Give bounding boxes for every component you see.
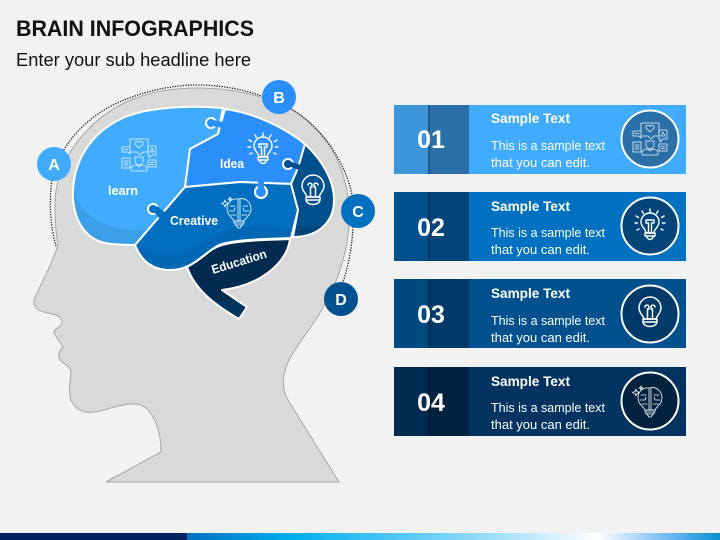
brain piece: learn — [70, 107, 223, 250]
title: BRAIN INFOGRAPHICS — [16, 16, 254, 41]
panel: row 03: Sample Text — [491, 285, 570, 301]
panel: row 03: 03 — [417, 301, 445, 329]
panel: row 02 — [394, 192, 686, 261]
icon: learn — [122, 139, 156, 171]
head illustration — [34, 80, 375, 482]
panel: row 03: that you can edit. — [491, 331, 590, 345]
label: education: Education — [210, 247, 268, 277]
badge C: C — [352, 204, 364, 221]
panel: row 03 — [394, 279, 686, 348]
head silhouette — [34, 88, 349, 482]
badge A — [37, 147, 71, 181]
brain piece: idea — [185, 109, 305, 187]
panel: row 04: This is a sample text — [491, 401, 606, 415]
panel: row 02: 02 — [417, 214, 445, 242]
badge D: D — [335, 292, 347, 309]
panel: row 02: This is a sample text — [491, 226, 606, 240]
panel: row 01: Sample Text — [491, 110, 570, 126]
badge B — [262, 80, 296, 114]
panel: row 02: Sample Text — [491, 198, 570, 214]
panel: row 03: This is a sample text — [491, 314, 606, 328]
panel: row 04: that you can edit. — [491, 418, 590, 432]
panel: row 04 — [394, 367, 686, 436]
panel: row 04: Sample Text — [491, 373, 570, 389]
label: creative: Creative — [170, 214, 218, 228]
icon: plain bulb — [302, 175, 324, 204]
dotted arc around head — [50, 85, 353, 282]
brain piece: creative — [135, 178, 298, 275]
badge C — [341, 194, 375, 228]
label: idea: Idea — [220, 157, 245, 171]
subtitle: Enter your sub headline here — [16, 50, 251, 70]
brain piece: education — [187, 239, 290, 322]
badge A: A — [48, 157, 60, 174]
panel: row 04: 04 — [417, 389, 445, 417]
panel: row 01: This is a sample text — [491, 139, 606, 153]
label: learn: learn — [108, 184, 138, 198]
bottom colour bar — [0, 533, 720, 540]
brain piece: dark lobe — [283, 144, 335, 240]
panel: row 01 — [394, 105, 686, 174]
badge B: B — [273, 90, 285, 107]
badge D — [324, 282, 358, 316]
panel: row 01: that you can edit. — [491, 156, 590, 170]
icon: idea bulb — [248, 133, 278, 164]
icon: brain bulb — [222, 197, 251, 228]
panel: row 01: 01 — [417, 126, 445, 154]
panel: row 02: that you can edit. — [491, 243, 590, 257]
